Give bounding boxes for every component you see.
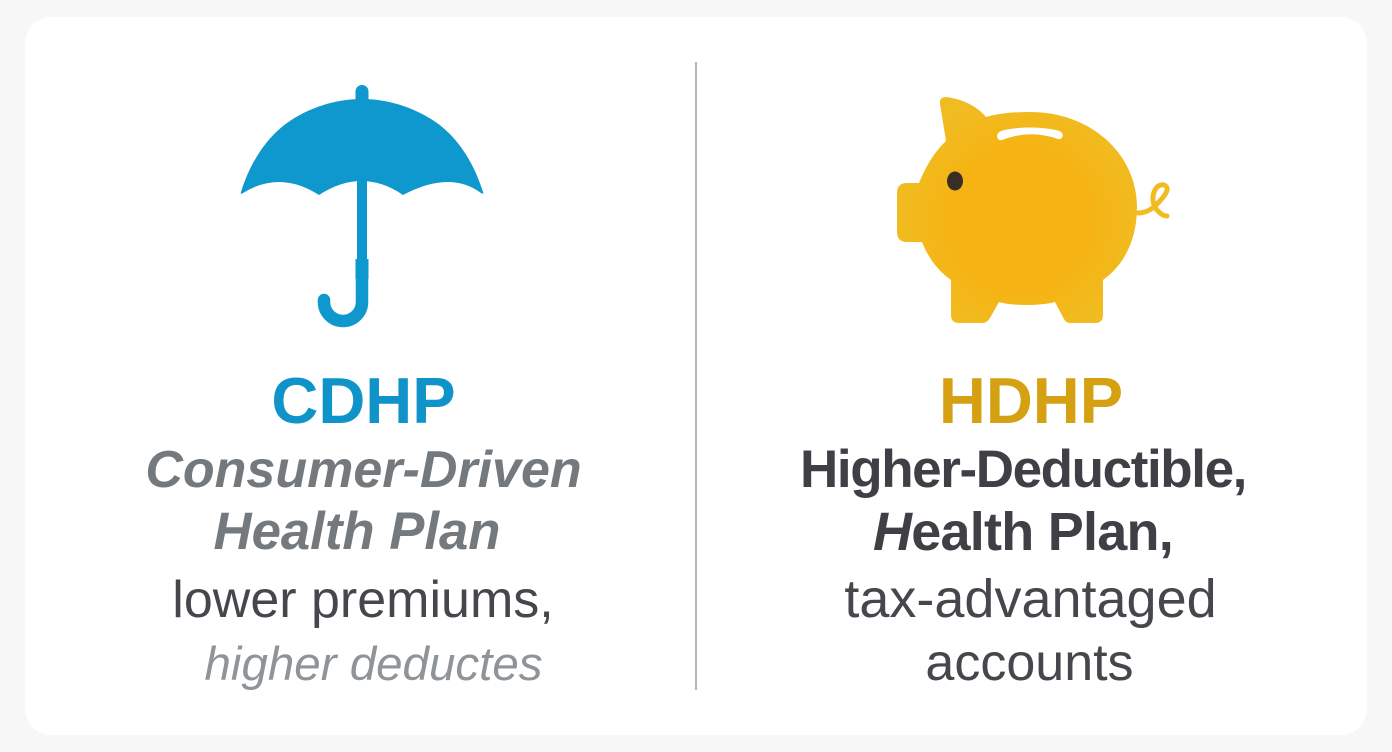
divider line — [695, 62, 697, 690]
text: Higher-Deductible: Higher-Deductible, — [800, 440, 1246, 499]
heading: HDHP: HDHP — [939, 364, 1123, 437]
icon: piggy bank — [897, 97, 1170, 323]
text: tax-advantaged: tax-advantaged — [844, 569, 1217, 629]
text: higher deductes: higher deductes — [204, 638, 543, 691]
text: lower premiums: lower premiums, — [172, 571, 554, 629]
text: accounts: accounts — [925, 634, 1134, 692]
text: Health Plan: Health Plan — [214, 502, 500, 561]
icon: umbrella — [240, 85, 484, 328]
heading: CDHP: CDHP — [271, 364, 456, 437]
text: Health Plan: Health Plan, — [873, 502, 1173, 562]
text: Consumer-Driven: Consumer-Driven — [145, 441, 582, 499]
